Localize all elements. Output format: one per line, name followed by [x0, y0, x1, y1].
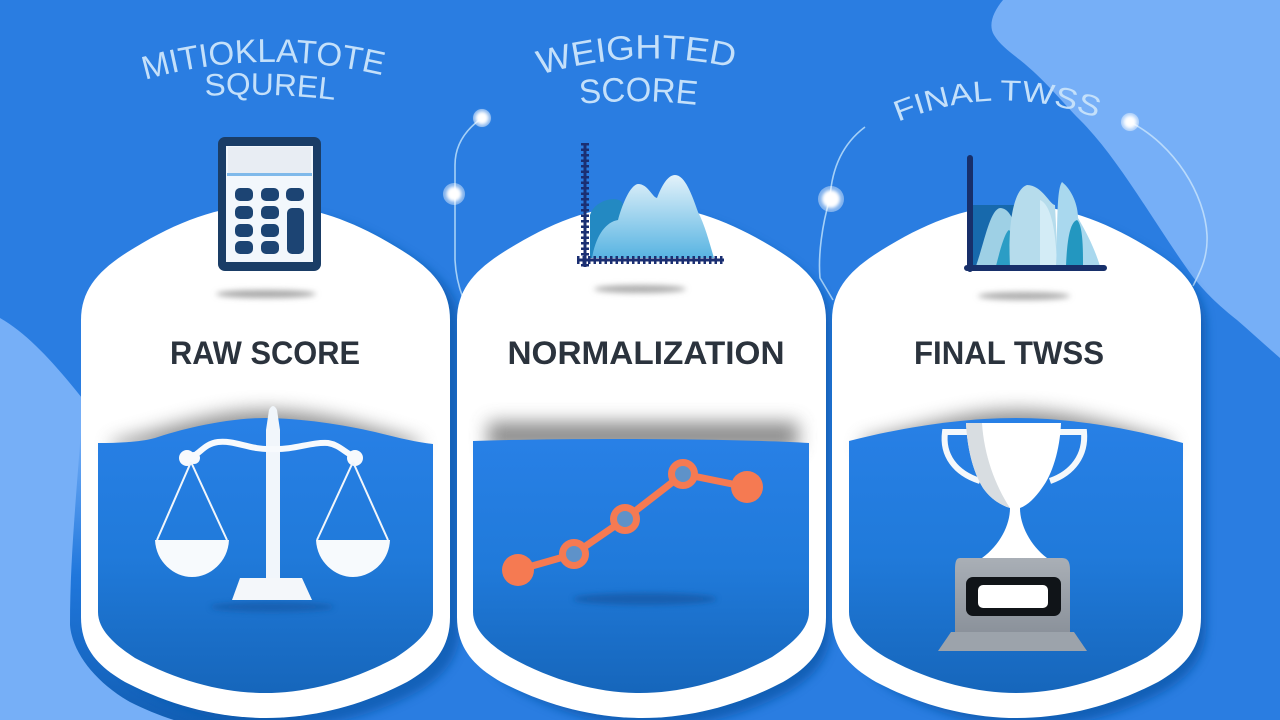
curved label: column 1: SQUREL [206, 73, 334, 100]
blue well [849, 418, 1183, 693]
panel: raw score [70, 137, 460, 720]
curved label: column 1: MITIOKLATOTE [142, 39, 385, 80]
icon: multi-peak chart [967, 158, 1104, 269]
icon: balance scale [155, 406, 390, 612]
icon shadow [594, 285, 686, 293]
curved label: column 1 [142, 39, 385, 100]
connector lines and nodes [443, 109, 1207, 300]
curved label: column 2: SCORE [581, 78, 697, 105]
heading: raw score: RAW SCORE [170, 335, 360, 371]
well shadow [862, 410, 1172, 450]
icon: orange line chart [502, 462, 763, 605]
panel: normalization [457, 143, 831, 720]
panel: final twss [832, 158, 1206, 720]
curved label: column 2: WEIGHTED [534, 35, 734, 73]
well shadow [112, 410, 420, 450]
decorative corner shape: top right [991, 0, 1280, 358]
well shadow [488, 422, 798, 450]
heading: final twss: FINAL TWSS [914, 335, 1104, 371]
blue well [98, 418, 433, 693]
heading: normalization: NORMALIZATION [508, 335, 784, 371]
decorative corner shape: bottom left [0, 318, 240, 720]
icon: calculator [218, 137, 321, 271]
icon: trophy [938, 423, 1087, 651]
icon: area chart [577, 143, 724, 267]
curved label: column 3: FINAL TWSS [894, 80, 1100, 121]
icon shadow [978, 292, 1070, 300]
curved label: column 2 [534, 35, 734, 105]
blue well [473, 439, 809, 693]
icon shadow [216, 290, 316, 298]
